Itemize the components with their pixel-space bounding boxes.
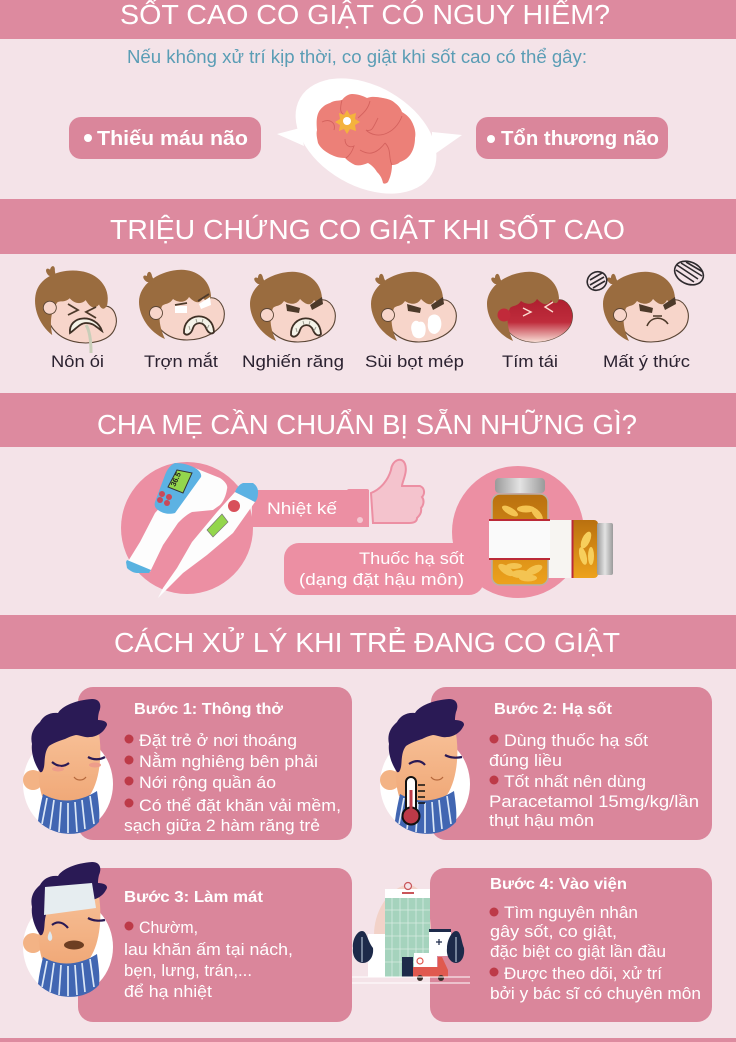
step heading: Bước 2: Hạ sốt [494, 701, 613, 718]
icon: eye rolling face [139, 270, 224, 340]
step heading: Bước 3: Làm mát [124, 889, 264, 906]
icon: foaming face [371, 272, 456, 342]
icon: boy with thermometer [380, 699, 470, 834]
label: Mất ý thức [603, 352, 691, 371]
pill: brain damage: Tổn thương não [501, 128, 659, 150]
label: Nghiến răng [242, 352, 344, 371]
icon: digital thermometer [158, 483, 258, 598]
step text: bẹn, lưng, trán,... [124, 961, 252, 980]
step text: Dùng thuốc hạ sốt [504, 731, 648, 750]
panel: thermometer [121, 460, 424, 598]
step text: Đặt trẻ ở nơi thoáng [139, 731, 297, 750]
panel: fever medicine [284, 466, 613, 598]
step text: Được theo dõi, xử trí [504, 964, 662, 983]
label: medicine: Thuốc hạ sốt [359, 550, 464, 568]
icon: infrared thermometer [126, 463, 227, 573]
label: Nôn ói [51, 352, 104, 371]
pill: brain ischemia [69, 117, 261, 159]
step text: sạch giữa 2 hàm răng trẻ [124, 816, 320, 835]
pill: brain ischemia: Thiếu máu não [97, 128, 248, 150]
step text [490, 903, 701, 1003]
symptom: foaming mouth [365, 272, 464, 371]
symptom: teeth grinding [242, 272, 344, 371]
symptom: vomiting [27, 262, 127, 371]
icon: red face [487, 272, 572, 342]
step text: Nới rộng quần áo [139, 773, 276, 792]
label: medicine [299, 550, 464, 589]
icon: infrared thermometer: 36.5 [169, 471, 183, 488]
label: Tím tái [502, 352, 558, 371]
label: Sùi bọt mép [365, 352, 464, 371]
icon: thumbs up [347, 460, 424, 527]
section band: title 1 [0, 0, 736, 39]
step text: Nằm nghiêng bên phải [139, 752, 318, 771]
icon: boy with cold towel [23, 862, 113, 997]
step text: Paracetamol 15mg/kg/lần [489, 792, 699, 811]
icon: vomiting face [27, 262, 127, 353]
icon: hospital [352, 882, 470, 983]
icon: unconscious face [603, 272, 688, 342]
heading: symptoms: TRIỆU CHỨNG CO GIẬT KHI SỐT CAO [110, 213, 625, 245]
pill: brain damage [476, 117, 668, 159]
intro text: Nếu không xử trí kịp thời, co giật khi sốt cao có thể gây: [127, 47, 587, 67]
step text: Tốt nhất nên dùng [504, 772, 646, 791]
section band: title 2 [0, 199, 736, 254]
section band: title 3 [0, 393, 736, 447]
symptom: loss of consciousness [584, 257, 707, 371]
section band: title 4 [0, 615, 736, 669]
step heading: Bước 1: Thông thở [134, 701, 284, 718]
icon: teeth grinding face [250, 272, 335, 342]
panel: step 2 [380, 687, 712, 840]
label: thermometer: Nhiệt kế [267, 499, 338, 518]
heading: prepare: CHA MẸ CẦN CHUẨN BỊ SẴN NHỮNG GÌ? [97, 408, 637, 440]
symptom: cyanosis [487, 272, 572, 371]
step text: Chườm, [139, 918, 198, 937]
step heading: Bước 4: Vào viện [490, 876, 627, 893]
bottom band [0, 1038, 736, 1042]
icon: brain speech bubble [275, 55, 462, 217]
label: Trợn mắt [144, 352, 218, 371]
panel: step 4 [430, 868, 712, 1022]
heading: handling: CÁCH XỬ LÝ KHI TRẺ ĐANG CO GIẬT [114, 626, 620, 658]
label band [252, 490, 369, 527]
step text [124, 918, 293, 1001]
step text [489, 731, 699, 830]
step text [124, 731, 341, 835]
step text: đặc biệt co giật lần đầu [490, 942, 666, 961]
step text: đúng liều [489, 751, 562, 770]
icon: boy breathing [23, 699, 113, 834]
panel: step 3 [23, 862, 352, 1022]
panel: step 1 [23, 687, 352, 840]
symptom: eye rolling [139, 270, 224, 371]
icon: first bottle [489, 478, 550, 585]
icon: dizzy swirl left [584, 268, 610, 294]
label band [284, 543, 484, 595]
step text: để hạ nhiệt [124, 982, 212, 1001]
step text: bởi y bác sĩ có chuyên môn [490, 984, 701, 1003]
step text: thụt hậu môn [489, 811, 594, 830]
step text: lau khăn ấm tại nách, [124, 940, 293, 959]
step text: gây sốt, co giật, [490, 922, 617, 941]
step text: Tìm nguyên nhân [504, 903, 638, 922]
icon: second bottle horizontal [547, 520, 613, 578]
icon: dizzy swirl right [671, 257, 707, 289]
label: medicine: (dạng đặt hậu môn) [299, 571, 464, 589]
step text: Có thể đặt khăn vải mềm, [139, 796, 341, 815]
